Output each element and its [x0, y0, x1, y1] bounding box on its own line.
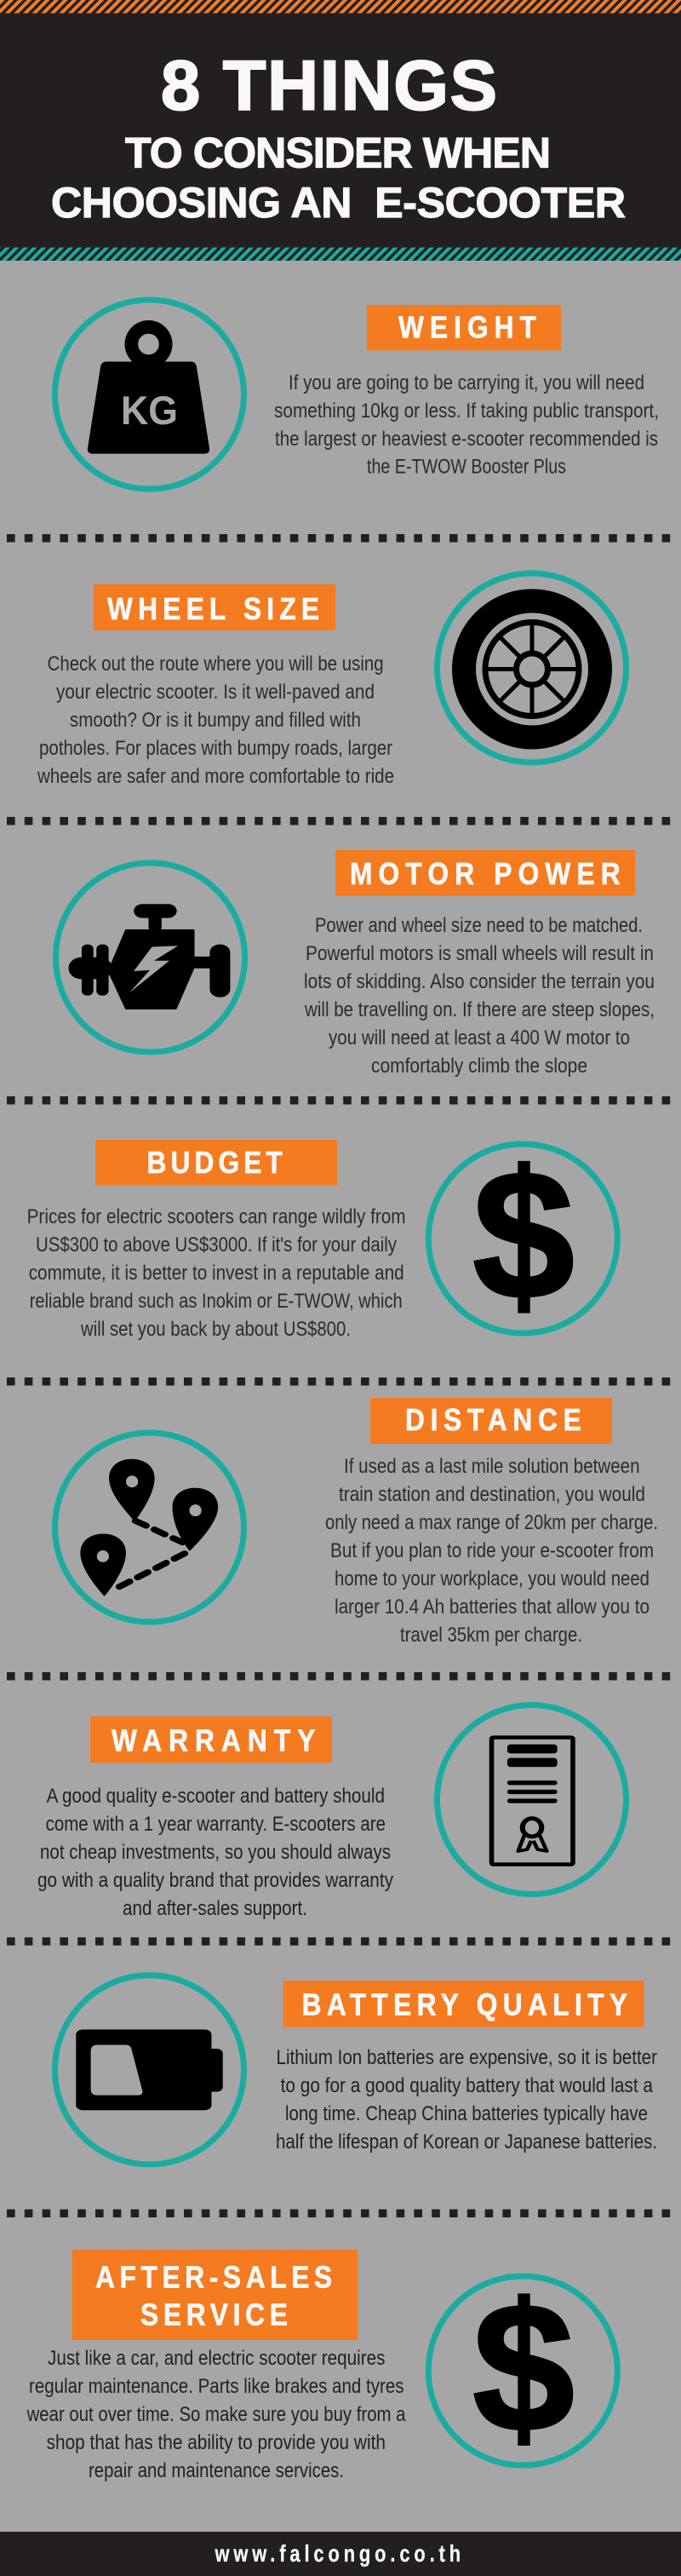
text: after-sales service	[26, 2347, 406, 2482]
heading: warranty: WARRANTY	[112, 1724, 316, 1758]
text: distance: travel 35km per charge.	[400, 1624, 582, 1647]
text: wheel size: wheels are safer and more comfortable to ride	[37, 765, 394, 788]
icon: dollar sign	[428, 2264, 617, 2470]
title	[51, 46, 626, 227]
text: distance	[325, 1455, 658, 1647]
text: warranty: not cheap investments, so you should always	[40, 1841, 391, 1864]
text: budget: reliable brand such as Inokim or E-TWOW, which	[30, 1290, 403, 1313]
panel: distance	[54, 1398, 658, 1647]
heading: wheel size	[94, 584, 335, 630]
text: budget: Prices for electric scooters can range wildly from	[27, 1205, 406, 1228]
title: 8 THINGS	[161, 46, 497, 124]
panel: battery quality	[54, 1975, 657, 2165]
text: wheel size: potholes. For places with bumpy roads, larger	[39, 737, 392, 760]
heading: motor power	[335, 850, 635, 895]
text: motor power: you will need at least a 400 W motor to	[329, 1026, 630, 1049]
panel: wheel size	[37, 573, 626, 788]
heading: weight: WEIGHT	[398, 311, 536, 345]
text: motor power	[304, 914, 655, 1078]
heading: distance: DISTANCE	[405, 1403, 581, 1437]
footer	[0, 2532, 681, 2576]
footer: www.falcongo.co.th	[215, 2540, 461, 2567]
text: wheel size: Check out the route where you will be using	[48, 653, 384, 676]
text: weight	[274, 371, 659, 479]
text: after-sales service: Just like a car, and electric scooter requires	[48, 2347, 385, 2370]
text: warranty: and after-sales support.	[123, 1897, 307, 1920]
icon: certificate	[438, 1705, 627, 1895]
text: weight: the E-TWOW Booster Plus	[367, 455, 566, 479]
text: warranty: come with a 1 year warranty. E-scooters are	[46, 1813, 386, 1836]
icon: battery	[54, 1975, 243, 2165]
icon: dollar sign: $	[472, 2264, 575, 2470]
icon: kg weight: KG	[121, 388, 178, 433]
text: warranty	[37, 1785, 393, 1920]
text: battery quality	[276, 2046, 657, 2153]
heading: weight	[367, 305, 561, 350]
text: wheel size: smooth? Or is it bumpy and filled with	[70, 709, 361, 732]
text: budget: US$300 to above US$3000. If it's for your daily	[36, 1233, 397, 1256]
panel: budget	[27, 1132, 617, 1341]
icon: dollar sign	[428, 1132, 617, 1337]
text: after-sales service: shop that has the ability to provide you with	[47, 2431, 386, 2454]
text: warranty: A good quality e-scooter and battery should	[47, 1785, 385, 1808]
heading: battery quality: BATTERY QUALITY	[302, 1988, 627, 2022]
text: after-sales service: wear out over time. So make sure you buy from a	[26, 2403, 406, 2426]
icon: map pins	[54, 1433, 243, 1622]
heading: battery quality	[283, 1981, 644, 2027]
heading: wheel size: WHEEL SIZE	[107, 592, 319, 626]
heading: budget	[95, 1140, 337, 1186]
text: distance: If used as a last mile solution between	[344, 1455, 640, 1478]
panel: after-sales service	[26, 2250, 617, 2482]
text: budget	[27, 1205, 406, 1341]
text: after-sales service: repair and maintenance services.	[89, 2459, 344, 2482]
header banner	[0, 0, 681, 261]
panel: warranty	[37, 1705, 627, 1920]
heading: after-sales service: AFTER-SALES	[95, 2261, 332, 2295]
heading: warranty	[90, 1716, 332, 1762]
heading: distance	[370, 1398, 612, 1444]
icon: dollar sign: $	[472, 1132, 575, 1337]
heading: budget: BUDGET	[146, 1146, 283, 1180]
text: motor power: comfortably climb the slope	[371, 1055, 587, 1078]
text: budget: commute, it is better to invest in a reputable and	[29, 1262, 404, 1285]
icon: kg weight	[54, 300, 243, 489]
heading: motor power: MOTOR POWER	[350, 857, 621, 891]
title: CHOOSING AN E-SCOOTER	[51, 179, 626, 227]
panel: weight	[54, 300, 659, 489]
icon: engine	[56, 863, 245, 1052]
title: TO CONSIDER WHEN	[125, 129, 551, 177]
panel: motor power	[56, 850, 655, 1078]
heading: after-sales service	[72, 2250, 358, 2340]
icon: wheel	[438, 573, 627, 762]
text: budget: will set you back by about US$800.	[80, 1318, 351, 1341]
text: after-sales service: regular maintenance. Parts like brakes and tyres	[29, 2375, 403, 2398]
heading: after-sales service: SERVICE	[140, 2298, 288, 2332]
text: wheel size: your electric scooter. Is it well-paved and	[56, 681, 375, 704]
text: wheel size	[37, 653, 394, 788]
text: warranty: go with a quality brand that provides warranty	[37, 1869, 393, 1892]
